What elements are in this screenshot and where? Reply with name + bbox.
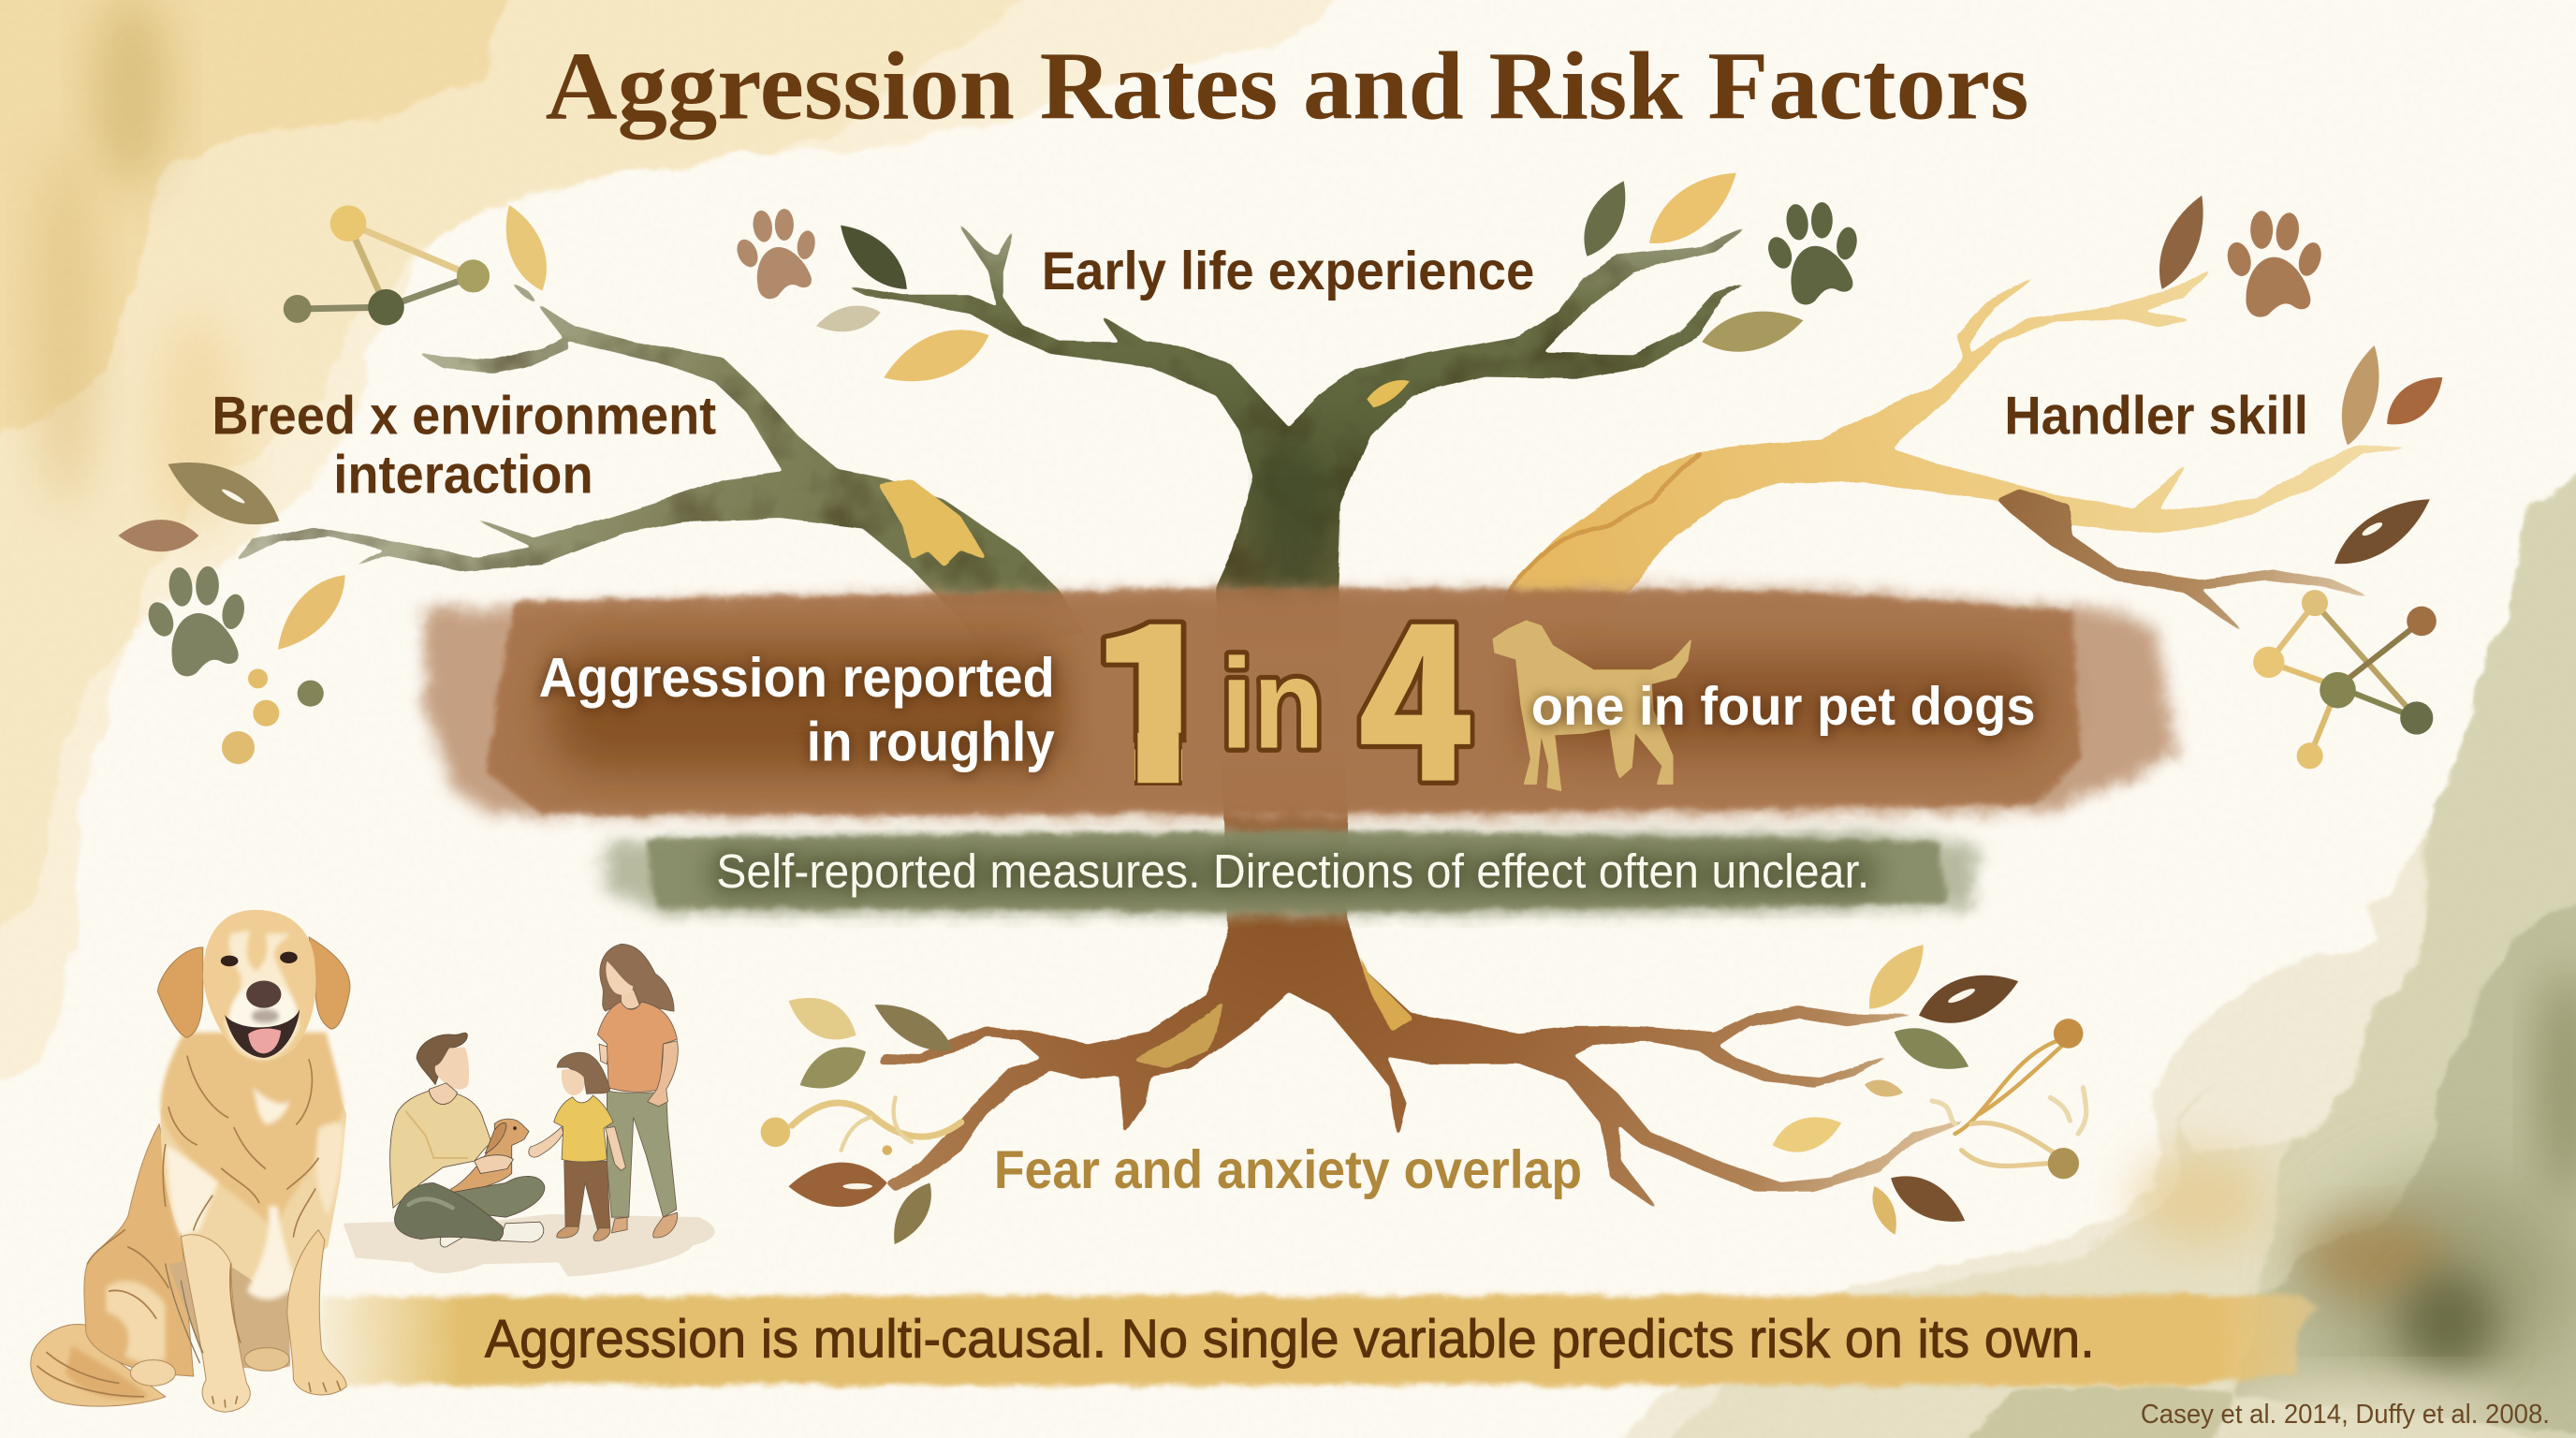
root end nodes	[761, 1019, 2083, 1179]
belly	[168, 1247, 290, 1369]
text: aggression reported in roughly: in roughly	[807, 711, 1055, 773]
icon: network top-left	[284, 205, 490, 326]
panel: main statistic band	[424, 588, 2177, 818]
text: aggression reported in roughly: Aggression reported	[539, 646, 1055, 709]
blaze	[225, 931, 300, 1060]
pale bottom haze	[2217, 1380, 2513, 1438]
eyes	[221, 956, 238, 966]
front legs	[181, 1235, 250, 1412]
label: breed x environment interaction: Breed x environment	[212, 386, 716, 446]
tree	[237, 220, 2413, 1210]
label: early life experience: Early life experience	[1042, 242, 1534, 301]
upper chest	[161, 1073, 346, 1291]
white bib	[251, 1087, 290, 1124]
mid wash	[1643, 477, 2576, 1438]
ochre patches on roots	[1134, 945, 1412, 1068]
label: breed x environment interaction	[212, 386, 716, 506]
label: fear and anxiety overlap: Fear and anxiety overlap	[994, 1140, 1582, 1200]
white chest left	[166, 1145, 218, 1237]
back and haunch	[84, 1124, 194, 1376]
man	[390, 1033, 545, 1247]
text: conclusion: Aggression is multi-causal. No single variable predicts risk on its own.	[485, 1310, 2095, 1370]
mouth	[225, 1009, 300, 1058]
golden branch	[1486, 268, 2413, 640]
panel: conclusion band	[320, 1295, 2320, 1386]
nose	[246, 980, 281, 1008]
child	[529, 1052, 625, 1240]
darker sage wash	[2234, 888, 2576, 1438]
back paw	[130, 1360, 175, 1386]
branch: breed x environment	[237, 283, 1084, 657]
text: citation: Casey et al. 2014, Duffy et al. 2008.	[2141, 1400, 2550, 1430]
illustration: golden retriever	[31, 910, 350, 1412]
icon: network right	[2253, 590, 2437, 769]
decorative dots	[222, 668, 324, 764]
text: aggression reported in roughly	[539, 646, 1055, 773]
gold tint	[2134, 1151, 2265, 1249]
right ear	[309, 937, 350, 1029]
woman	[597, 944, 678, 1238]
muzzle	[230, 984, 298, 1047]
statistic: 1 in 4	[1101, 620, 1475, 785]
statistic: 1 in 4: in	[1221, 633, 1325, 776]
label: handler skill: Handler skill	[2004, 386, 2308, 446]
pale outer wash	[1600, 822, 2576, 1438]
trunk and top branches	[846, 220, 1748, 822]
fur strokes	[37, 1056, 340, 1407]
orange stain on golden branch	[1508, 452, 1701, 592]
right chest	[315, 1123, 344, 1216]
trunk lower and roots	[879, 805, 1969, 1210]
statistic: 1 in 4: 4	[1357, 532, 1475, 844]
thigh	[106, 1281, 166, 1363]
ground shadow	[344, 1214, 715, 1277]
brown sub-branch	[1998, 490, 2372, 633]
text: caveat: Self-reported measures. Directions of effect often unclear.	[716, 844, 1869, 898]
yellow fleck on right limb	[1367, 380, 1410, 407]
tail	[31, 1325, 166, 1406]
watercolor wash: top-left	[0, 0, 1364, 1093]
mane	[161, 1033, 344, 1230]
text: one in four pet dogs: one in four pet dogs	[1531, 677, 2036, 737]
tongue	[248, 1029, 281, 1053]
icon: dog silhouette	[1493, 621, 1690, 790]
puppy	[451, 1119, 529, 1193]
dark bloom	[2398, 1270, 2497, 1375]
root veins	[792, 1038, 2086, 1166]
label: breed x environment interaction: interaction	[333, 446, 593, 506]
left ear	[157, 947, 203, 1037]
icon: paw prints	[140, 196, 2325, 680]
upper sage wash	[2202, 477, 2576, 1438]
broad olive shade	[2320, 1180, 2576, 1384]
leaf highlights	[221, 488, 2384, 1189]
watercolor wash: bottom-right	[1600, 477, 2576, 1438]
head	[203, 910, 315, 1060]
illustration: family with puppy	[344, 944, 715, 1277]
statistic: 1 in 4: 1	[1083, 532, 1227, 844]
yellow patch on left limb	[879, 479, 986, 567]
panel: caveat band	[601, 831, 1980, 916]
title: Aggression Rates and Risk Factors	[546, 33, 2029, 139]
brown tint	[2302, 1218, 2446, 1297]
dark bottom wash	[1939, 1384, 2234, 1438]
leaves	[118, 157, 2452, 1251]
dark streaks on trunk	[1262, 444, 1327, 608]
